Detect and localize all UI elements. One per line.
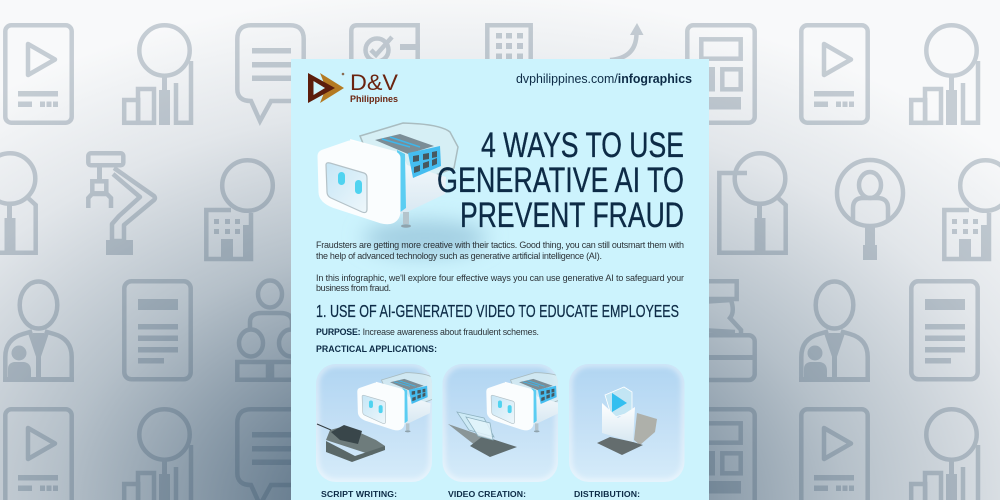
panel: infographic page	[291, 59, 709, 500]
icon: video document	[801, 409, 868, 500]
illustration: small robot	[361, 373, 437, 432]
icon: page layout	[687, 409, 755, 500]
illustration: open folder with video sheets	[448, 412, 517, 457]
icon: page layout	[687, 25, 755, 123]
icon: document	[911, 281, 978, 379]
icon: magnifier over document	[0, 153, 36, 253]
illustration: typewriter	[317, 424, 385, 462]
intro text	[316, 240, 684, 293]
card label: distribution: DISTRIBUTION:	[574, 489, 640, 499]
title	[437, 126, 684, 235]
intro text: the help of advanced technology such as generative artificial intelligence (AI).	[316, 251, 602, 261]
icon: document	[124, 281, 191, 379]
sub-heading: PRACTICAL APPLICATIONS:	[316, 344, 437, 354]
icon: video document	[5, 25, 72, 123]
icon: robot arm	[88, 153, 155, 255]
card label: video creation: VIDEO CREATION:	[448, 489, 526, 499]
section heading: 1. USE OF AI-GENERATED VIDEO TO EDUCATE EMPLOYEES	[316, 301, 679, 321]
icon: magnifier over building	[206, 160, 273, 260]
logo: D&V Philippines: D&V	[350, 70, 398, 95]
icon: group of people	[237, 280, 303, 380]
title: PREVENT FRAUD	[460, 196, 684, 235]
purpose text: PURPOSE: Increase awareness about fraudulent schemes.	[316, 327, 539, 337]
intro text: Fraudsters are getting more creative with their tactics. Good thing, you can still outsmart them with	[316, 240, 684, 250]
icon: magnifier with bar chart	[911, 25, 978, 125]
icon: stamp on desk	[700, 281, 755, 380]
icon: magnifier over document	[719, 153, 786, 253]
intro text: business from fraud.	[316, 283, 391, 293]
logo: D&V Philippines: Philippines	[350, 94, 398, 104]
card: video creation	[442, 364, 566, 482]
illustration: AI robot	[324, 123, 458, 228]
card label: script writing: SCRIPT WRITING:	[321, 489, 397, 499]
icon: magnifier with bar chart	[124, 409, 191, 500]
icon: speech bubble	[237, 25, 304, 121]
title: GENERATIVE AI TO	[437, 161, 684, 200]
icon: checklist document	[351, 25, 420, 70]
title: 4 WAYS TO USE	[481, 126, 684, 165]
icon: magnifier over person	[837, 160, 903, 260]
website address: dvphilippines.com/infographics	[516, 72, 692, 86]
card: script writing	[316, 364, 437, 482]
icon: magnifier over building	[944, 160, 1000, 260]
card: distribution	[569, 364, 684, 482]
icon: video document	[801, 25, 868, 123]
intro text: In this infographic, we'll explore four effective ways you can use generative AI to safeguard your	[316, 273, 684, 283]
illustration: envelope with play button	[597, 387, 657, 455]
icon: magnifier with bar chart	[911, 409, 978, 500]
icon: rising arrow	[610, 23, 644, 60]
icon: video document	[5, 409, 72, 500]
icon: speech bubble	[237, 409, 304, 500]
icon: magnifier with bar chart	[124, 25, 191, 125]
illustration: small robot	[490, 373, 566, 432]
logo: D&V Philippines	[308, 70, 398, 104]
robot shadow	[363, 220, 487, 256]
icon: office building	[487, 25, 531, 70]
icon: business person	[3, 282, 74, 382]
icon: business person	[799, 282, 870, 382]
